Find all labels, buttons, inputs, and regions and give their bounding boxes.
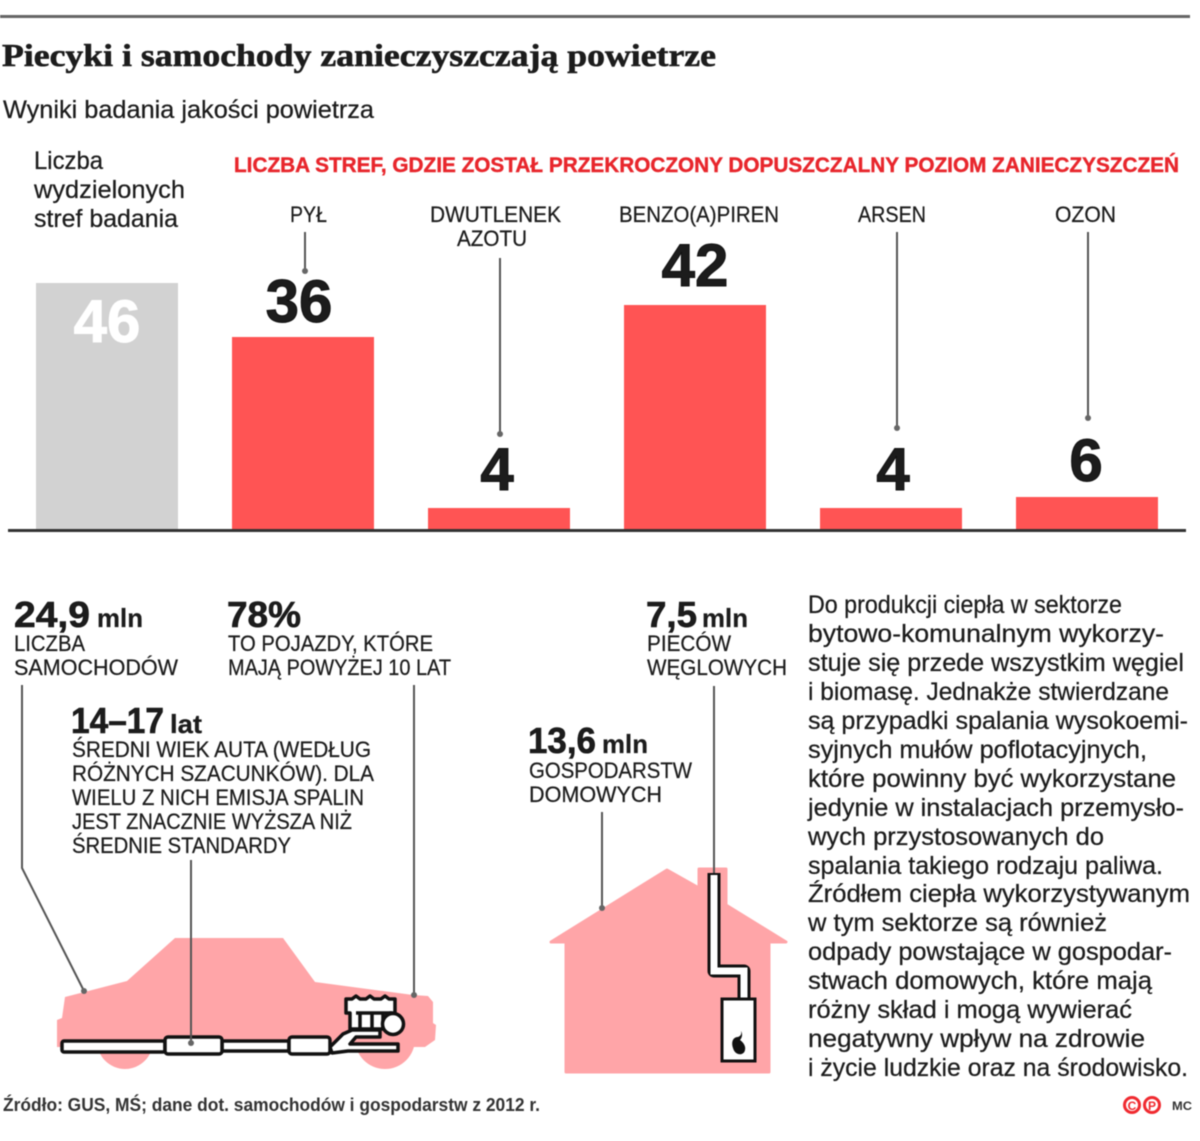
body text: syjnych mułów poflotacyjnych, (808, 736, 1147, 764)
bar: total zones 46 (36, 283, 178, 530)
body text: w tym sektorze są również (807, 909, 1107, 937)
stat: 14-17 years: ŚREDNIE STANDARDY (72, 833, 291, 858)
stat: 78% vehicles (227, 594, 451, 998)
stat: 14-17 years (71, 700, 374, 1046)
zones label: wydzielonych (33, 176, 185, 204)
exhaust pipes (62, 1030, 398, 1054)
stat: 14-17 years: WIELU Z NICH EMISJA SPALIN (72, 785, 364, 810)
bar: DWUTLENEK AZOTU 4: 4 (480, 436, 514, 503)
bar: ARSEN 4 (820, 202, 962, 530)
body text: negatywny wpływ na zdrowie (808, 1025, 1145, 1053)
bar: OZON 6: OZON (1055, 202, 1116, 227)
stat: 24,9 mln cars: mln (97, 603, 143, 633)
stat: 13,6 mln households: DOMOWYCH (529, 782, 662, 807)
bar: BENZO(A)PIREN 42: 42 (662, 232, 728, 299)
engine (346, 996, 404, 1034)
icon: car with exhaust system (57, 938, 436, 1069)
bar: PYŁ 36 (232, 202, 374, 530)
body text: odpady powstające w gospodar- (808, 938, 1172, 966)
stat: 78% vehicles: MAJĄ POWYŻEJ 10 LAT (228, 655, 451, 680)
stat: 14-17 years: JEST ZNACZNIE WYŻSZA NIŻ (72, 809, 352, 834)
stat: 7,5 mln stoves: WĘGLOWYCH (647, 655, 787, 680)
body text: różny skład i mogą wywierać (808, 996, 1132, 1024)
stat: 24,9 mln cars: LICZBA (14, 631, 85, 656)
author initials: MC (1172, 1099, 1192, 1113)
stat: 14-17 years: ŚREDNI WIEK AUTA (WEDŁUG (72, 737, 371, 762)
stat: 14-17 years: RÓŻNYCH SZACUNKÓW). DLA (72, 761, 374, 786)
bar: OZON 6: 6 (1069, 427, 1103, 494)
body text: i biomasę. Jednakże stwierdzane (808, 678, 1169, 706)
body text (807, 591, 1190, 1082)
stat: 7,5 mln stoves: mln (702, 603, 748, 633)
stat: 14-17 years: 14–17 (71, 700, 164, 741)
chimney flue (714, 873, 744, 998)
agency logo CP: P (1148, 1099, 1156, 1113)
stat: 7,5 mln stoves: 7,5 (646, 594, 697, 635)
title: Piecyki i samochody zanieczyszczają powietrze (2, 37, 716, 73)
stat: 14-17 years: lat (170, 709, 202, 739)
agency logo CP (1124, 1098, 1160, 1113)
body text: które powinny być wykorzystane (808, 765, 1176, 793)
source: Źródło: GUS, MŚ; dane dot. samochodów i gospodarstw z 2012 r. (3, 1094, 540, 1115)
zones label: stref badania (34, 205, 178, 233)
body text: wych przystosowanych do (807, 823, 1104, 851)
stat: 7,5 mln stoves (646, 594, 787, 873)
subtitle: Wyniki badania jakości powietrza (3, 96, 374, 124)
stat: 78% vehicles: 78% (227, 594, 301, 635)
body text: stuje się przede wszystkim węgiel (808, 649, 1184, 677)
bar: DWUTLENEK AZOTU 4: AZOTU (457, 226, 527, 251)
bar: total zones 46: 46 (74, 288, 140, 355)
stat: 13,6 mln households: GOSPODARSTW (529, 758, 692, 783)
bar: BENZO(A)PIREN 42: BENZO(A)PIREN (619, 202, 779, 227)
bar: DWUTLENEK AZOTU 4 (428, 202, 570, 530)
bar: DWUTLENEK AZOTU 4: DWUTLENEK (430, 202, 561, 227)
zones label: Liczba (34, 147, 103, 175)
bar: PYŁ 36: 36 (266, 268, 332, 335)
body text: bytowo-komunalnym wykorzy- (808, 620, 1164, 648)
bar: ARSEN 4: 4 (876, 436, 910, 503)
zones label (33, 147, 185, 233)
bar: OZON 6 (1016, 202, 1158, 530)
body text: jedynie w instalacjach przemysło- (807, 794, 1184, 822)
body text: spalania takiego rodzaju paliwa. (808, 852, 1163, 880)
body text: Źródłem ciepła wykorzystywanym (808, 879, 1190, 908)
body text: stwach domowych, które mają (808, 967, 1152, 995)
stat: 24,9 mln cars (14, 594, 178, 994)
bar: ARSEN 4: ARSEN (858, 202, 926, 227)
body text: Do produkcji ciepła w sektorze (808, 591, 1122, 619)
bar: PYŁ 36: PYŁ (290, 202, 327, 227)
stat: 13,6 mln households: mln (602, 729, 648, 759)
stat: 24,9 mln cars: SAMOCHODÓW (14, 655, 178, 680)
red chart heading: LICZBA STREF, GDZIE ZOSTAŁ PRZEKROCZONY DOPUSZCZALNY POZIOM ZANIECZYSZCZEŃ (234, 154, 1179, 177)
stat: 13,6 mln households: 13,6 (528, 720, 596, 761)
stat: 13,6 mln households (528, 720, 692, 911)
flame (732, 1031, 745, 1054)
stat: 24,9 mln cars: 24,9 (14, 594, 90, 635)
bar: BENZO(A)PIREN 42 (619, 202, 779, 530)
stove (722, 999, 755, 1061)
stat: 78% vehicles: TO POJAZDY, KTÓRE (228, 631, 433, 656)
body text: i życie ludzkie oraz na środowisko. (808, 1054, 1188, 1082)
stat: 7,5 mln stoves: PIECÓW (647, 631, 731, 656)
body text: są przypadki spalania wysokoemi- (808, 707, 1188, 735)
agency logo CP: C (1128, 1099, 1137, 1113)
bar chart (8, 202, 1186, 532)
icon: house with chimney and stove (551, 869, 786, 1072)
